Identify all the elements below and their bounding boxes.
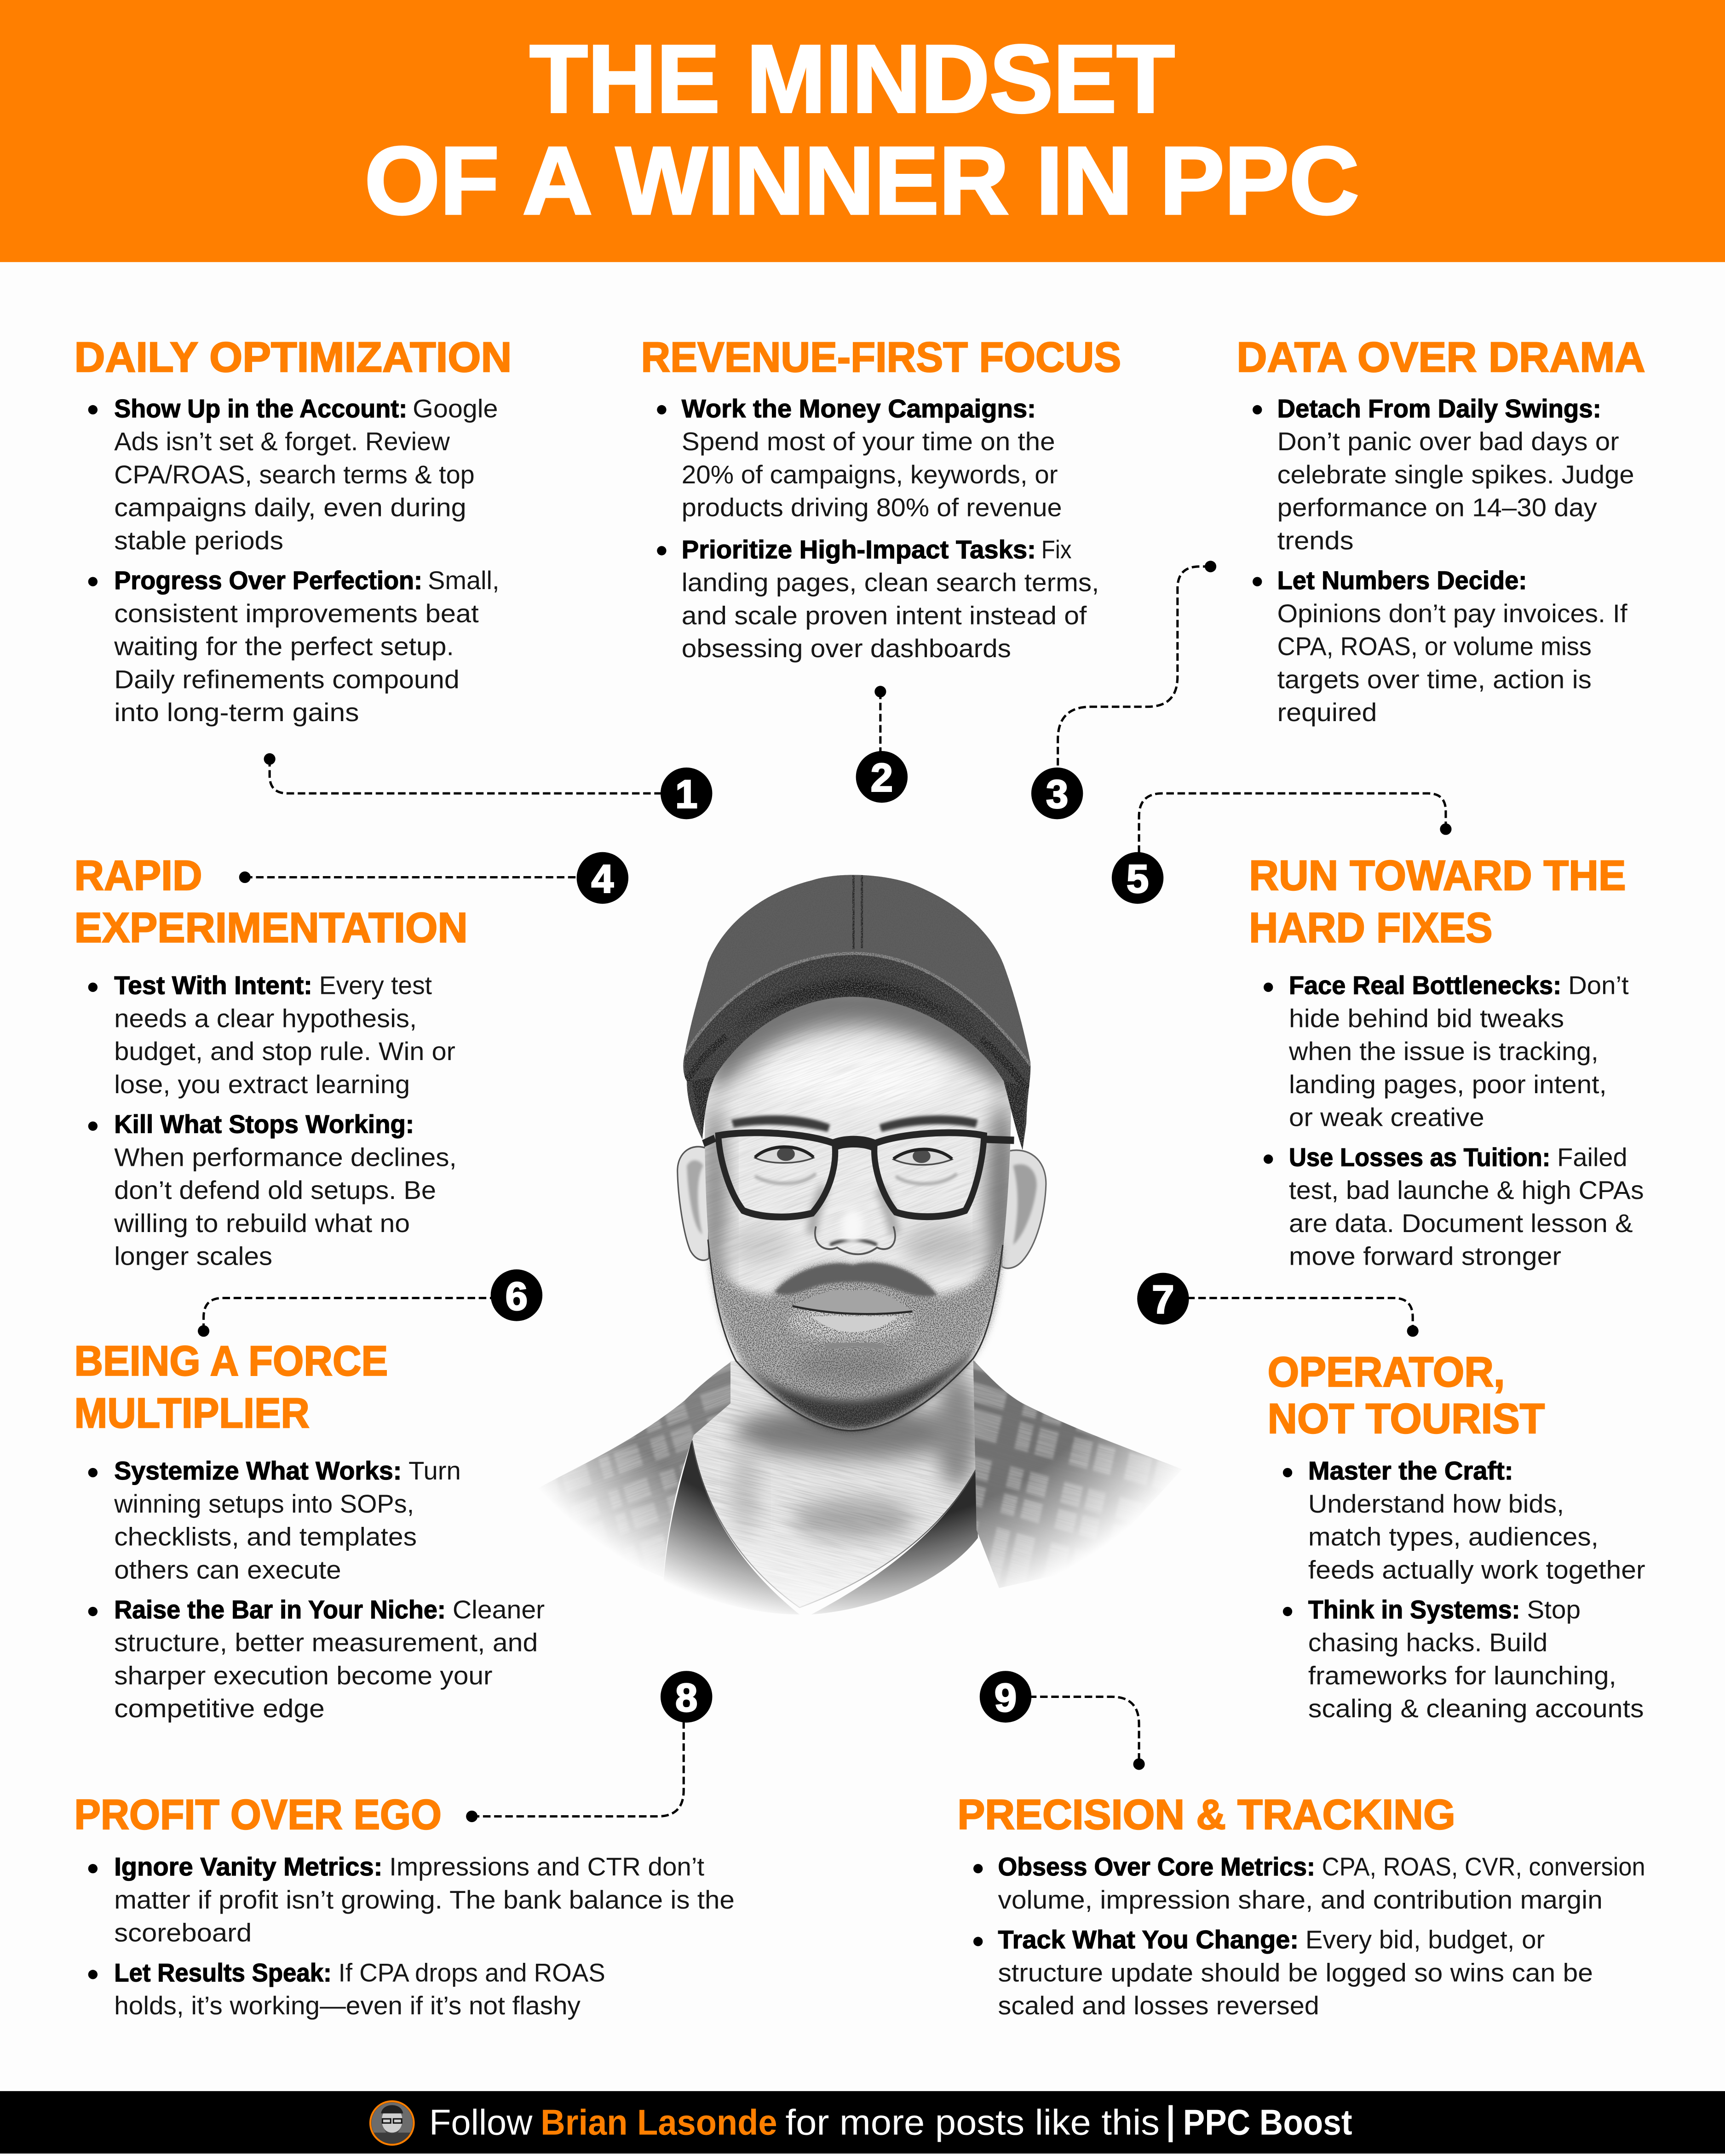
bullet: use losses as tuition: move forward stronger [1289, 1242, 1561, 1271]
bullet: systemize what works: Systemize What Works: [114, 1456, 402, 1485]
bullet: progress over perfection: Small, [428, 566, 500, 595]
bullet: progress over perfection [88, 566, 500, 727]
bullet: show up in the account: Ads isn’t set & forget. Review [114, 427, 450, 456]
panel: being a force multiplier [74, 1337, 545, 1723]
bullet: master the craft: Understand how bids, [1308, 1490, 1564, 1518]
bullet: face real bottlenecks: Face Real Bottlenecks: [1289, 971, 1561, 1000]
bullet: work the money campaigns [657, 394, 1062, 522]
bullet: track what you change [973, 1926, 1593, 2020]
bullet: test with intent: budget, and stop rule. Win or [114, 1037, 455, 1066]
portrait glasses [703, 1133, 1014, 1217]
bullet: raise the bar in your niche: sharper execution become your [114, 1662, 493, 1690]
bullet: ignore vanity metrics: scoreboard [114, 1919, 252, 1947]
number badge 8 [661, 1671, 712, 1723]
heading: OPERATOR, [1268, 1348, 1505, 1395]
heading: RAPID [74, 852, 202, 899]
bullet: use losses as tuition: are data. Document lesson & [1289, 1209, 1633, 1238]
number badge 3: 3 [1046, 773, 1068, 817]
bullet: let numbers decide: required [1277, 698, 1377, 727]
heading: DAILY OPTIMIZATION [74, 334, 512, 381]
number badge 5: 5 [1127, 857, 1149, 901]
connector 9 [1029, 1697, 1145, 1770]
title [364, 26, 1359, 235]
connector 4 [239, 872, 581, 883]
bullet: let numbers decide: Opinions don’t pay invoices. If [1277, 599, 1627, 628]
bullet: work the money campaigns: 20% of campaigns, keywords, or [682, 460, 1058, 489]
heading [74, 852, 468, 952]
bullet: test with intent [88, 971, 455, 1099]
bullet: master the craft: Master the Craft: [1308, 1456, 1513, 1485]
heading: PROFIT OVER EGO [74, 1791, 442, 1838]
number badge 2 [856, 751, 908, 803]
bullet: master the craft: feeds actually work together [1308, 1555, 1645, 1584]
panel: data over drama [1236, 334, 1645, 727]
bullet: show up in the account: Google [413, 394, 498, 423]
footer bar [0, 2091, 1725, 2154]
footer text: Brian Lasonde [540, 2103, 777, 2143]
bullet: track what you change: Every bid, budget, or [1305, 1926, 1545, 1954]
bullet: let numbers decide: targets over time, action is [1277, 665, 1592, 694]
bullet: track what you change: Track What You Change: [998, 1926, 1299, 1954]
bullet: progress over perfection: Daily refinements compound [114, 665, 460, 694]
bullet: face real bottlenecks: landing pages, poor intent, [1289, 1070, 1607, 1099]
heading: REVENUE-FIRST FOCUS [641, 334, 1121, 381]
bullet: work the money campaigns: products driving 80% of revenue [682, 493, 1062, 522]
number badge 3 [1031, 768, 1083, 819]
bullet: detach from daily swings: trends [1277, 526, 1354, 555]
panel: revenue-first focus [641, 334, 1121, 663]
bullet: let numbers decide: CPA, ROAS, or volume miss [1277, 632, 1592, 661]
bullet: progress over perfection: waiting for the perfect setup. [114, 632, 454, 661]
bullet: face real bottlenecks: or weak creative [1289, 1103, 1484, 1132]
panel: daily optimization [74, 334, 512, 727]
bullet: test with intent: lose, you extract learning [114, 1070, 410, 1099]
bullet: systemize what works: winning setups into SOPs, [114, 1490, 414, 1518]
title banner [0, 0, 1725, 262]
number badge 7 [1137, 1273, 1189, 1325]
connector 8 [466, 1721, 684, 1822]
bullet: prioritize high-impact tasks: landing pages, clean search terms, [682, 568, 1099, 597]
connector 5 [1139, 793, 1452, 855]
bullet: let results speak: If CPA drops and ROAS [339, 1958, 605, 1987]
number badge 6: 6 [506, 1274, 528, 1319]
bullet: ignore vanity metrics [88, 1852, 735, 1947]
connector 3 [1058, 561, 1216, 770]
bullet: let results speak [88, 1958, 605, 2020]
number badge 7: 7 [1152, 1278, 1174, 1322]
portrait beard [684, 1229, 1032, 1451]
bullet: systemize what works: checklists, and templates [114, 1523, 417, 1551]
bullet: face real bottlenecks [1264, 971, 1629, 1132]
heading: DATA OVER DRAMA [1236, 334, 1645, 381]
bullet: use losses as tuition: Use Losses as Tuition: [1289, 1143, 1550, 1171]
bullet: obsess over core metrics: CPA, ROAS, CVR, conversion [1322, 1852, 1645, 1881]
bullet: track what you change: scaled and losses reversed [998, 1991, 1319, 2020]
bullet: prioritize high-impact tasks: Prioritize High-Impact Tasks: [682, 535, 1036, 564]
bullet: let numbers decide: Let Numbers Decide: [1277, 566, 1527, 595]
bullet: test with intent: Every test [319, 971, 432, 1000]
bullet: raise the bar in your niche: Raise the Bar in Your Niche: [114, 1595, 446, 1624]
bullet: kill what stops working: Kill What Stops Working: [114, 1110, 414, 1139]
bullet: let results speak: Let Results Speak: [114, 1958, 332, 1987]
portrait eyes and eyebrows [731, 1115, 978, 1184]
panel: precision and tracking [957, 1791, 1645, 2020]
footer text [429, 2103, 1352, 2143]
heading: EXPERIMENTATION [74, 905, 468, 952]
panel: profit over ego [74, 1791, 735, 2020]
bullet: detach from daily swings [1253, 394, 1634, 555]
bullet: progress over perfection: Progress Over Perfection: [114, 566, 422, 595]
bullet: kill what stops working: don’t defend old setups. Be [114, 1176, 436, 1204]
number badge 2: 2 [871, 756, 893, 800]
portrait left ear [678, 1147, 709, 1260]
panel: rapid experimentation [74, 852, 468, 1271]
number badge 1 [661, 768, 712, 819]
heading [74, 1337, 388, 1437]
bullet: prioritize high-impact tasks: Fix [1041, 535, 1072, 564]
bullet: raise the bar in your niche: structure, better measurement, and [114, 1628, 538, 1657]
connector 7 [1187, 1298, 1419, 1337]
bullet: obsess over core metrics: volume, impression share, and contribution margin [998, 1886, 1603, 1914]
bullet: test with intent: Test With Intent: [114, 971, 312, 1000]
number badge 9: 9 [995, 1676, 1017, 1720]
footer text: for more posts like this [786, 2103, 1160, 2143]
bullet: use losses as tuition: Failed [1557, 1143, 1627, 1171]
portrait neck [692, 1361, 976, 1608]
bullet: prioritize high-impact tasks [657, 535, 1099, 663]
bullet: raise the bar in your niche: Cleaner [453, 1595, 545, 1624]
bullet: use losses as tuition: test, bad launche & high CPAs [1289, 1176, 1644, 1204]
bullet: master the craft [1283, 1456, 1645, 1584]
bullet: use losses as tuition [1264, 1143, 1644, 1271]
bullet: detach from daily swings: Detach From Daily Swings: [1277, 394, 1601, 423]
bullet: show up in the account: stable periods [114, 526, 283, 555]
bullet: raise the bar in your niche [88, 1595, 545, 1723]
bullet: ignore vanity metrics: Ignore Vanity Metrics: [114, 1852, 382, 1881]
portrait moustache and mouth [775, 1262, 937, 1348]
bullet: obsess over core metrics [973, 1852, 1645, 1914]
bullet: think in systems: Stop [1527, 1595, 1581, 1624]
title: THE MINDSET [529, 26, 1175, 133]
bullet: face real bottlenecks: hide behind bid tweaks [1289, 1004, 1564, 1032]
plaid shirt right [973, 1360, 1177, 1588]
bullet: let results speak: holds, it’s working—even if it’s not flashy [114, 1991, 581, 2020]
footer avatar [370, 2101, 414, 2146]
heading: MULTIPLIER [74, 1390, 310, 1437]
footer text: PPC Boost [1183, 2103, 1352, 2143]
bullet: face real bottlenecks: when the issue is tracking, [1288, 1037, 1598, 1066]
connector 1 [264, 753, 663, 793]
bullet: test with intent: needs a clear hypothesis, [114, 1004, 417, 1032]
number badge 4 [577, 852, 628, 904]
connector 2 [874, 686, 886, 753]
portrait torso [546, 1360, 1177, 1614]
bullet: detach from daily swings: Don’t panic over bad days or [1277, 427, 1619, 456]
bullet: raise the bar in your niche: competitive edge [114, 1694, 325, 1723]
heading: RUN TOWARD THE [1249, 852, 1626, 899]
portrait baseball cap [680, 870, 1036, 1155]
bullet: master the craft: match types, audiences, [1308, 1523, 1598, 1551]
bullet: work the money campaigns: Spend most of your time on the [682, 427, 1055, 456]
panel: run toward the hard fixes [1249, 852, 1644, 1271]
heading: NOT TOURIST [1268, 1395, 1545, 1442]
bullet: progress over perfection: consistent improvements beat [114, 599, 479, 628]
bullet: show up in the account: CPA/ROAS, search terms & top [114, 460, 475, 489]
bullet: detach from daily swings: celebrate single spikes. Judge [1277, 460, 1634, 489]
bullet: face real bottlenecks: Don’t [1568, 971, 1629, 1000]
bullet: systemize what works: others can execute [114, 1555, 341, 1584]
bullet: show up in the account: campaigns daily, even during [114, 493, 466, 522]
number badge 6 [491, 1269, 542, 1321]
bullet: prioritize high-impact tasks: and scale proven intent instead of [682, 601, 1087, 630]
bullet: kill what stops working [88, 1110, 457, 1271]
heading: PRECISION & TRACKING [957, 1791, 1455, 1838]
bullet: track what you change: structure update should be logged so wins can be [998, 1958, 1593, 1987]
bullet: show up in the account: Show Up in the Account: [114, 394, 407, 423]
portrait face [705, 997, 1011, 1430]
portrait jaw outline [708, 1239, 1003, 1431]
bullet: work the money campaigns: Work the Money Campaigns: [682, 394, 1036, 423]
portrait: pencil sketch of man in cap and glasses [472, 841, 1263, 1722]
portrait right ear [1001, 1150, 1046, 1268]
connector 6 [198, 1298, 493, 1337]
heading: HARD FIXES [1249, 905, 1493, 952]
panel: operator, not tourist [1268, 1348, 1645, 1723]
number badge 4: 4 [592, 857, 614, 901]
bullet: systemize what works: Turn [408, 1456, 461, 1485]
bullet: progress over perfection: into long-term gains [114, 698, 359, 727]
bullet: detach from daily swings: performance on 14–30 day [1277, 493, 1597, 522]
bullet: think in systems: scaling & cleaning accounts [1308, 1694, 1644, 1723]
heading [1268, 1348, 1545, 1442]
bullet: prioritize high-impact tasks: obsessing over dashboards [682, 634, 1011, 663]
plaid shirt left [546, 1362, 730, 1572]
bullet: let numbers decide [1253, 566, 1627, 727]
bullet: ignore vanity metrics: matter if profit isn’t growing. The bank balance is the [114, 1886, 735, 1914]
bullet: kill what stops working: longer scales [114, 1242, 272, 1271]
bullet: systemize what works [88, 1456, 461, 1584]
bullet: show up in the account [88, 394, 498, 555]
bullet: think in systems: Think in Systems: [1308, 1595, 1520, 1624]
number badge 9 [980, 1671, 1031, 1723]
number badge 1: 1 [675, 773, 697, 817]
bullet: think in systems: chasing hacks. Build [1308, 1628, 1547, 1657]
bullet: kill what stops working: willing to rebuild what no [114, 1209, 410, 1238]
portrait dark t-shirt [663, 1440, 978, 1614]
bullet: obsess over core metrics: Obsess Over Core Metrics: [998, 1852, 1315, 1881]
heading [1249, 852, 1626, 952]
number badge 5 [1112, 852, 1163, 904]
number badge 8: 8 [675, 1676, 697, 1720]
portrait nose [811, 1187, 895, 1254]
title: OF A WINNER IN PPC [364, 127, 1359, 235]
bullet: think in systems: frameworks for launching, [1308, 1662, 1616, 1690]
bullet: think in systems [1283, 1595, 1644, 1723]
heading: BEING A FORCE [74, 1337, 388, 1384]
bullet: ignore vanity metrics: Impressions and CTR don’t [389, 1852, 705, 1881]
footer text: Follow [429, 2103, 533, 2143]
bullet: kill what stops working: When performance declines, [114, 1143, 457, 1171]
